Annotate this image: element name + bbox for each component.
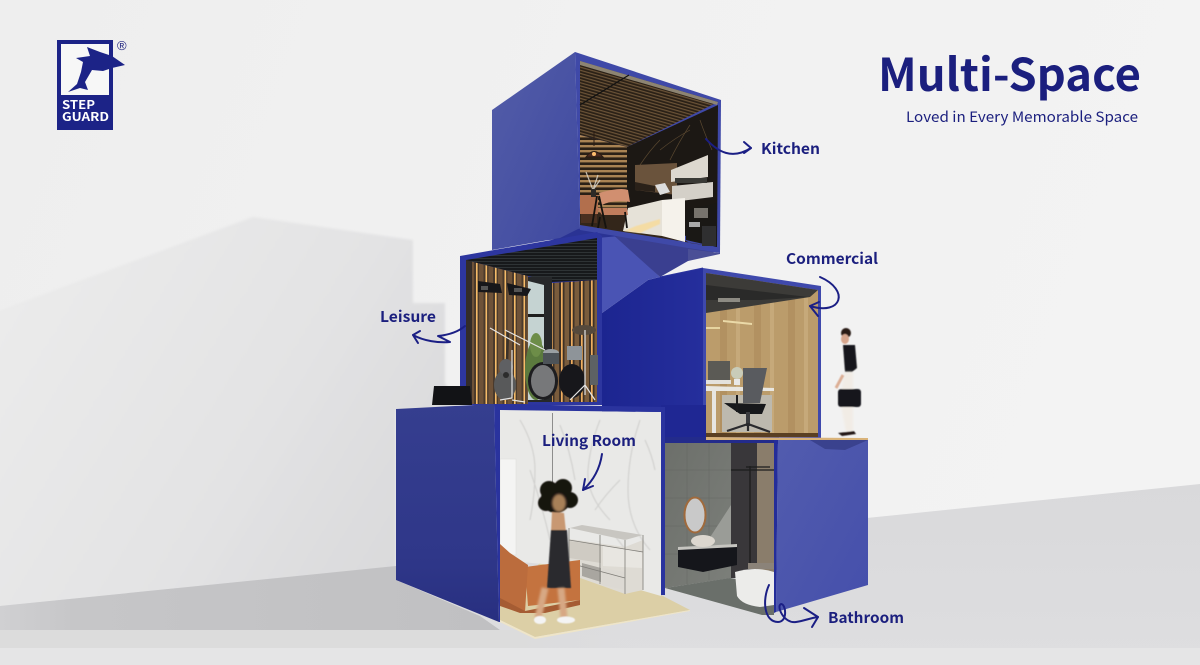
orange sofa bbox=[500, 544, 580, 613]
arrow: living room bbox=[583, 454, 602, 490]
panel: living room bbox=[396, 404, 690, 639]
person with briefcase bbox=[836, 328, 861, 436]
kitchen slatted wall bbox=[580, 135, 627, 215]
commercial floor bbox=[706, 433, 818, 437]
kitchen marble wall bbox=[627, 105, 718, 247]
speaker bbox=[432, 386, 472, 405]
label: Kitchen: Kitchen bbox=[761, 138, 820, 159]
kitchen pendant lamp bbox=[586, 131, 603, 157]
kitchen white shelf bbox=[671, 155, 708, 182]
panel: bathroom room bbox=[661, 405, 868, 615]
arrow: kitchen bbox=[706, 139, 751, 154]
bathroom concrete wall bbox=[665, 443, 731, 588]
living marble wall bbox=[500, 410, 661, 596]
logo bbox=[57, 38, 127, 130]
panel: leisure room bbox=[432, 232, 602, 405]
kitchen floor bbox=[580, 213, 717, 247]
subtitle: Loved in Every Memorable Space bbox=[906, 106, 1138, 127]
commercial rim bbox=[703, 268, 821, 440]
panel: commercial room bbox=[703, 268, 821, 440]
cabinet bbox=[569, 525, 643, 594]
living door bbox=[500, 459, 516, 555]
leisure right wall bbox=[552, 280, 597, 402]
label: Commercial: Commercial bbox=[786, 248, 878, 269]
bathroom side wall bbox=[776, 438, 868, 612]
leisure ceiling bbox=[466, 238, 597, 282]
icon: dolphin bbox=[68, 47, 125, 92]
office chair bbox=[724, 368, 770, 432]
label: Living Room: Living Room bbox=[542, 430, 636, 451]
arrow: commercial bbox=[810, 277, 839, 316]
kitchen appliance bbox=[686, 203, 717, 247]
leisure window bbox=[528, 277, 552, 402]
label: Bathroom: Bathroom bbox=[828, 607, 904, 628]
bathroom shower glass bbox=[731, 443, 774, 578]
arrow: leisure bbox=[413, 326, 465, 343]
commercial wood wall bbox=[706, 273, 818, 437]
title: Multi-Space bbox=[878, 39, 1141, 104]
round mirror bbox=[684, 498, 706, 532]
bathroom floor bbox=[665, 578, 774, 615]
leisure left wall bbox=[466, 260, 528, 404]
guitar bbox=[494, 332, 516, 400]
drum kit bbox=[490, 325, 598, 402]
arrow: bathroom bbox=[765, 585, 818, 627]
kitchen dining set bbox=[580, 195, 598, 214]
navy band above bathroom bbox=[661, 405, 706, 443]
spotlights bbox=[478, 281, 502, 293]
kitchen rim bbox=[575, 52, 721, 253]
bathtub bbox=[735, 569, 774, 607]
commercial lamps bbox=[723, 320, 752, 325]
leisure rim bbox=[460, 232, 602, 405]
kitchen outer face bbox=[492, 52, 580, 250]
registered mark: ® bbox=[117, 38, 127, 53]
kitchen coffee machines bbox=[672, 182, 713, 202]
logo wordmark: STEP bbox=[62, 96, 95, 113]
logo: GUARD bbox=[62, 108, 109, 125]
kitchen counter bbox=[662, 198, 685, 242]
kitchen vase bbox=[586, 172, 600, 190]
kitchen beige panel bbox=[635, 163, 677, 195]
living box rim bbox=[494, 404, 663, 622]
commercial ceiling bbox=[706, 273, 818, 313]
central blue mass bbox=[547, 228, 720, 440]
floor bbox=[0, 484, 1200, 665]
label: Leisure: Leisure bbox=[380, 306, 436, 327]
kitchen ceiling bbox=[580, 61, 718, 147]
woman in black dress bbox=[534, 479, 578, 624]
panel: kitchen box bbox=[492, 52, 721, 261]
living box outer face bbox=[396, 404, 499, 622]
vanity bbox=[678, 545, 737, 572]
commercial desk bbox=[706, 361, 774, 434]
living floor bbox=[500, 563, 690, 637]
ledge bbox=[706, 437, 868, 440]
wall shadow bbox=[0, 217, 460, 610]
